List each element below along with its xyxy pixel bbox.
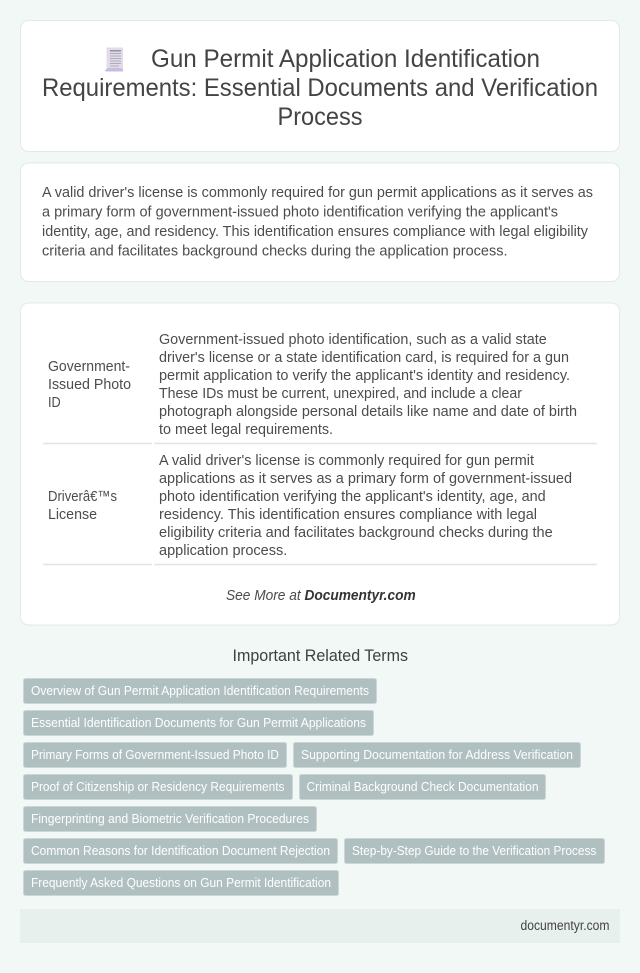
tag <box>24 806 316 832</box>
footer <box>20 909 620 943</box>
summary paragraph <box>42 185 593 260</box>
summary paragraph: A valid driver's license is commonly required for gun permit applications as it serves as <box>42 185 593 201</box>
panel: identification table <box>20 303 620 625</box>
tag <box>300 774 546 800</box>
row description: application process. <box>159 543 287 559</box>
tag <box>24 710 374 736</box>
row description: to meet legal requirements. <box>159 422 333 438</box>
tag <box>24 838 338 864</box>
row description <box>159 332 577 438</box>
tag <box>294 742 580 768</box>
row label: Issued Photo <box>48 377 131 393</box>
row description: residency. This identification ensures compliance with legal <box>159 507 537 523</box>
title: Gun Permit Application Identification <box>151 45 540 73</box>
row label: Driverâ€™s <box>48 489 117 505</box>
tag: Criminal Background Check Documentation <box>306 779 538 794</box>
row description: photograph alongside personal details like name and date of birth <box>159 404 577 420</box>
tag: Step-by-Step Guide to the Verification Process <box>352 843 597 858</box>
row description: applications as it serves as a primary form of government-issued <box>159 471 572 487</box>
tag <box>24 774 292 800</box>
tag <box>344 838 604 864</box>
heading: important related terms: Important Related Terms <box>232 646 408 665</box>
summary paragraph: a primary form of government-issued photo identification verifying the applicant's <box>42 204 558 220</box>
tag: Overview of Gun Permit Application Identification Requirements <box>31 683 369 698</box>
icon: document scroll <box>105 48 123 72</box>
row label <box>48 489 117 523</box>
tag <box>24 742 286 768</box>
table row: driver's license <box>48 453 572 559</box>
footer: documentyr.com <box>520 918 610 933</box>
see more link: See More at Documentyr.com <box>226 588 416 604</box>
title: Requirements: Essential Documents and Verification <box>42 74 598 102</box>
row description: driver's license or a state identification card, is required for a gun <box>159 350 569 366</box>
tag: Fingerprinting and Biometric Verification Procedures <box>31 811 309 826</box>
tag: Essential Identification Documents for Gun Permit Applications <box>31 715 366 730</box>
panel: title card <box>20 20 620 152</box>
title <box>42 45 598 131</box>
row description: permit application to verify the applicant's identity and residency. <box>159 368 570 384</box>
row description: A valid driver's license is commonly required for gun permit <box>159 453 534 469</box>
tag <box>24 678 376 704</box>
panel: summary text <box>20 163 620 282</box>
summary paragraph: identity, age, and residency. This identification ensures compliance with legal eligibility <box>42 224 589 240</box>
summary paragraph: criteria and facilitates background checks during the application process. <box>42 244 508 260</box>
tag: Proof of Citizenship or Residency Requirements <box>31 779 285 794</box>
panel: related term tags <box>24 678 604 896</box>
tag: Common Reasons for Identification Document Rejection <box>31 843 330 858</box>
title: Process <box>278 103 362 131</box>
table row: government-issued photo ID <box>48 332 577 438</box>
tag: Primary Forms of Government-Issued Photo ID <box>31 747 279 762</box>
row description: Government-issued photo identification, such as a valid state <box>159 332 547 348</box>
row label: Government- <box>48 359 130 375</box>
tag <box>24 870 338 896</box>
row label: License <box>48 507 97 523</box>
row description: photo identification verifying the applicant's identity, age, and <box>159 489 546 505</box>
row label <box>48 359 131 411</box>
tag: Supporting Documentation for Address Verification <box>301 747 573 762</box>
tag: Frequently Asked Questions on Gun Permit Identification <box>31 875 331 890</box>
row description: These IDs must be current, unexpired, and include a clear <box>159 386 522 402</box>
row label: ID <box>48 395 61 411</box>
row description <box>159 453 572 559</box>
row description: eligibility criteria and facilitates background checks during the <box>159 525 553 541</box>
